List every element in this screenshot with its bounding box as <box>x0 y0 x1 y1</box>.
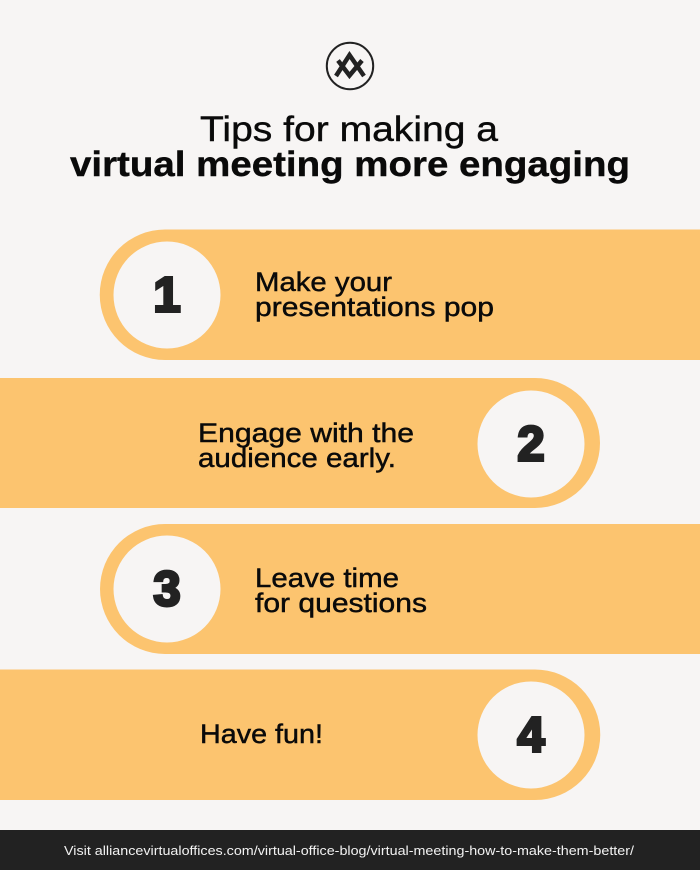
tip 3 text: Leave time <box>255 563 399 593</box>
number badge 3: 3 <box>153 562 181 616</box>
tip 2 text: Engage with the <box>198 418 414 448</box>
footer bar <box>0 830 700 870</box>
panel: tip 4 <box>0 670 600 800</box>
footer link text: Visit alliancevirtualoffices.com/virtual-office-blog/virtual-meeting-how-to-make-them-better/ <box>64 844 635 858</box>
tip 4 text: Have fun! <box>200 719 323 749</box>
panel: tip 3 <box>100 524 700 654</box>
tip 1 text: Make your <box>255 267 392 297</box>
number badge 2: 2 <box>517 418 545 472</box>
tip 1 text: presentations pop <box>255 292 494 322</box>
panel: tip 1 <box>100 230 700 360</box>
tip 3 text: for questions <box>255 588 427 618</box>
tip 2 text: audience early. <box>198 443 396 473</box>
title: virtual meeting more engaging <box>70 145 630 184</box>
number badge 2 <box>478 390 584 498</box>
tip 1 text <box>255 267 494 322</box>
number badge 4: 4 <box>517 708 545 762</box>
panel: tip 2 <box>0 378 600 508</box>
title <box>70 110 630 184</box>
number badge 3 <box>114 536 220 642</box>
number badge 1 <box>114 242 220 348</box>
number badge 1: 1 <box>153 268 181 322</box>
tip 3 text <box>255 563 427 618</box>
icon: mountain logo <box>327 43 373 89</box>
tip 2 text <box>198 418 414 473</box>
title: Tips for making a <box>200 110 499 149</box>
number badge 4 <box>478 682 584 788</box>
